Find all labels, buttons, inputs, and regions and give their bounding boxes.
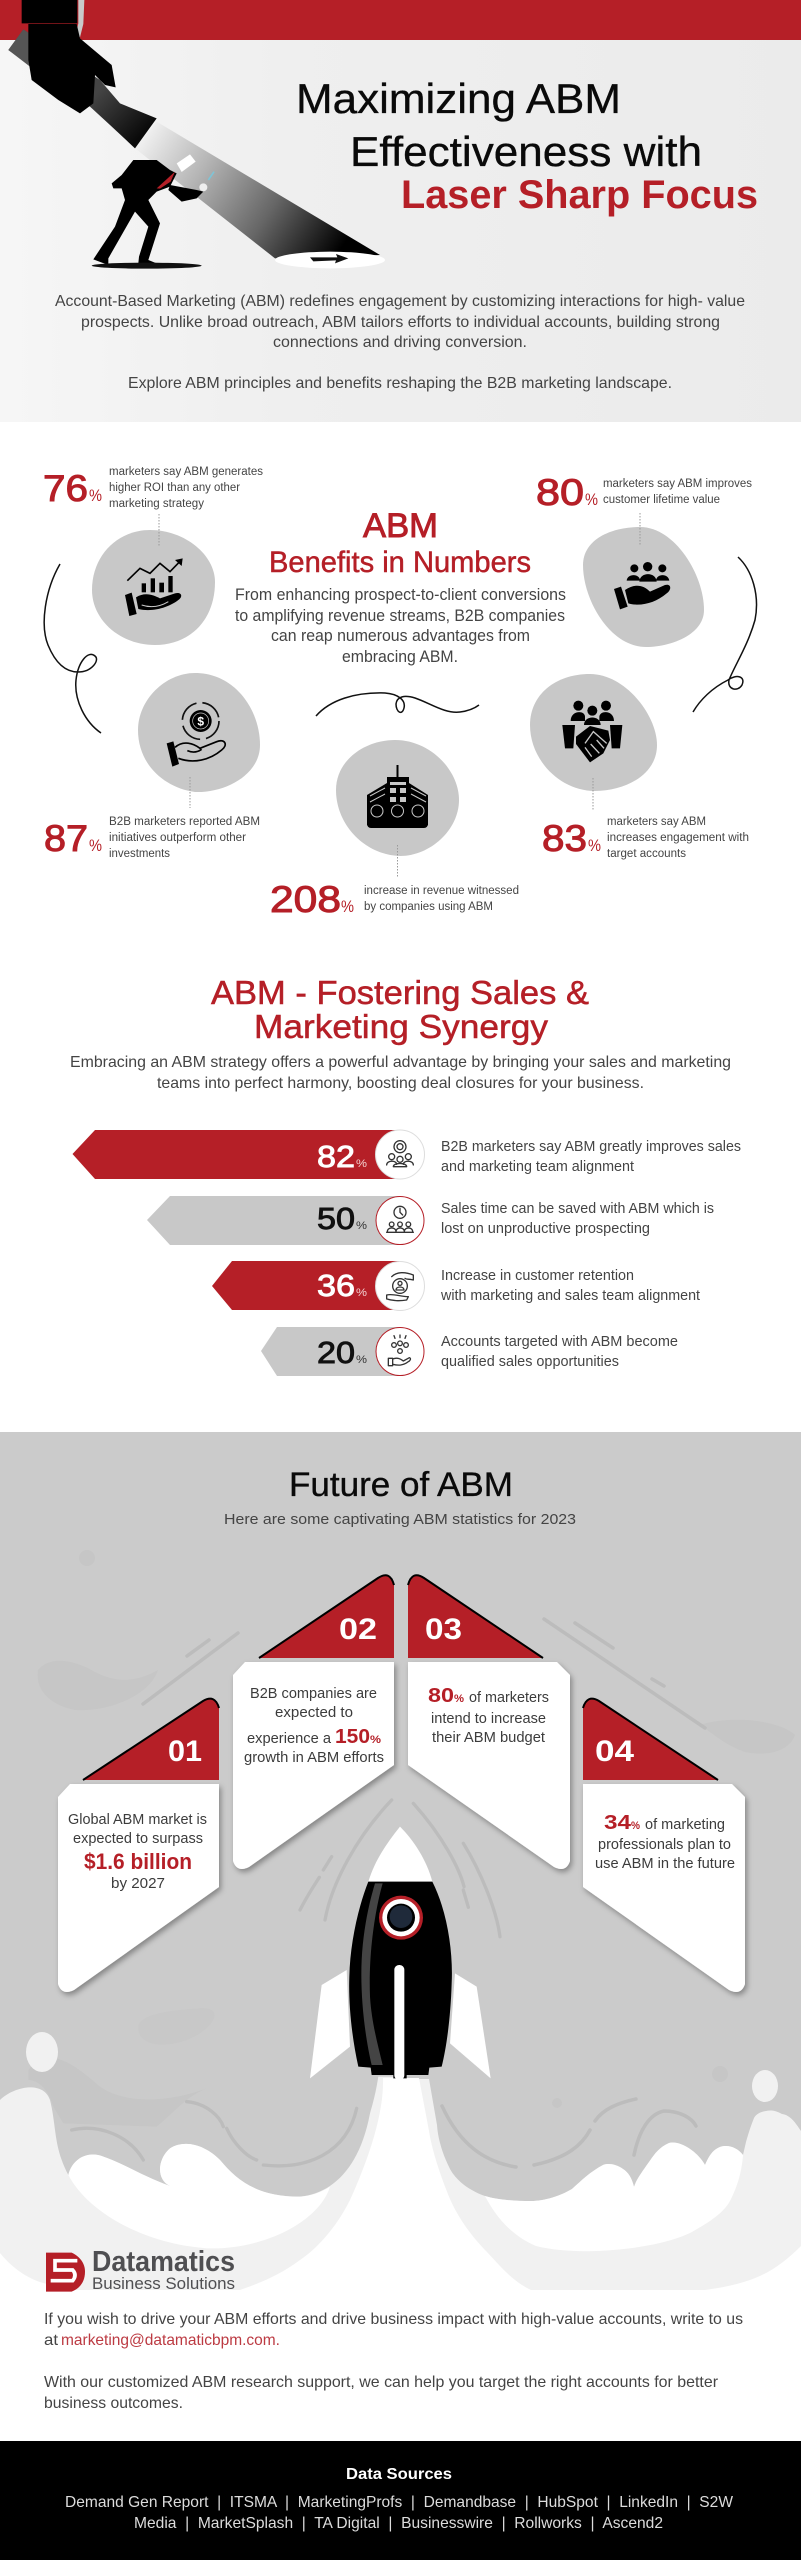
intro text: connections and driving conversion. [273, 334, 527, 351]
card 02: 150 [335, 1726, 370, 1748]
light smoke [0, 2077, 400, 2290]
card 02 [233, 1575, 394, 1869]
heading: ABM benefits [269, 507, 531, 579]
card 03 [408, 1575, 570, 1869]
bar: 36%: with marketing and sales team alignment [440, 1287, 701, 1304]
heading: ABM benefits: ABM [363, 507, 438, 545]
card 04: professionals plan to [598, 1837, 731, 1853]
stat: 87%: investments [109, 848, 170, 860]
illustration: rocket [310, 1827, 491, 2080]
bar: 20%: qualified sales opportunities [441, 1353, 619, 1370]
bar: 82%: and marketing team alignment [441, 1158, 635, 1175]
heading: synergy: ABM - Fostering Sales & [211, 974, 589, 1011]
panel: benefits in numbers [43, 466, 756, 920]
stat: 80%: customer lifetime value [603, 494, 720, 506]
blob icon: handshake [530, 674, 657, 811]
card 01: by 2027 [111, 1876, 165, 1892]
exhaust trail [240, 2078, 531, 2290]
panel: data sources footer: Demand Gen Report | ITSMA | MarketingProfs | Demandbase | HubSpot | LinkedIn | S2W [65, 2494, 734, 2511]
heading: synergy: Marketing Synergy [254, 1008, 549, 1045]
card 01 [58, 1699, 219, 1992]
icon: clock and team [387, 1206, 413, 1232]
benefits intro text [235, 585, 566, 666]
stat: 80%: marketers say ABM improves [603, 478, 752, 490]
stat: 87% [44, 816, 260, 860]
card 02: 02 [339, 1613, 377, 1646]
panel: data sources footer: Media | MarketSplash | TA Digital | Businesswire | Rollworks | Ascend2 [134, 2515, 663, 2532]
bar: 20%: Accounts targeted with ABM become [441, 1333, 678, 1350]
logo: Datamatics: Datamatics [92, 2246, 235, 2278]
contact text: at [44, 2332, 59, 2349]
card 02: B2B companies are [250, 1686, 377, 1702]
blob icon: people on hand [583, 513, 704, 647]
bar: 50%: 50 [317, 1201, 355, 1236]
bar: 20% [261, 1327, 678, 1376]
stat: 83%: increases engagement with [607, 832, 749, 844]
heading: synergy [211, 974, 589, 1045]
panel: data sources footer [0, 2441, 801, 2560]
card 03: 80 [428, 1685, 454, 1707]
benefits intro text: to amplifying revenue streams, B2B companies [235, 606, 565, 625]
card 02: % [370, 1734, 381, 1746]
stat: 83%: marketers say ABM [607, 816, 706, 828]
stat: 76%: marketing strategy [109, 498, 204, 510]
stat: 208%: % [341, 897, 354, 916]
title: Effectiveness with [350, 128, 702, 175]
synergy intro text [70, 1054, 731, 1092]
card 03: % [454, 1693, 464, 1705]
stat: 208%: 208 [270, 879, 341, 920]
title: Maximizing ABM [296, 75, 621, 122]
panel: data sources footer: Data Sources [346, 2466, 452, 2483]
stat: 80%: % [585, 490, 598, 509]
blob icon: dollar on hand: $ [197, 714, 204, 728]
bar: 50%: lost on unproductive prospecting [441, 1220, 650, 1237]
stat: 87%: % [89, 836, 102, 855]
card 02: growth in ABM efforts [244, 1750, 384, 1766]
bar: 82% [72, 1130, 741, 1179]
card 03: their ABM budget [432, 1730, 545, 1746]
subheading: Here are some captivating ABM statistics for 2023 [224, 1511, 576, 1528]
stat: 87%: 87 [44, 818, 88, 859]
icon: stars on hand [388, 1335, 410, 1366]
bar: 82%: % [356, 1158, 367, 1170]
bar: 50%: % [356, 1220, 367, 1232]
intro text: prospects. Unlike broad outreach, ABM tailors efforts to individual accounts, building strong [81, 314, 720, 331]
stat: 87%: initiatives outperform other [109, 832, 246, 844]
benefits intro text: embracing ABM. [342, 647, 458, 666]
stat: 208%: by companies using ABM [364, 901, 493, 913]
bar: 82%: 82 [317, 1139, 355, 1174]
contact text: business outcomes. [44, 2395, 183, 2412]
card 03: intend to increase [431, 1711, 546, 1727]
card 01: Global ABM market is [68, 1812, 207, 1828]
illustration: flashlight and businessman [8, 0, 385, 269]
card 04 [583, 1699, 745, 1992]
panel: header [0, 0, 801, 422]
bar: 50%: Sales time can be saved with ABM which is [441, 1200, 714, 1217]
benefits intro text: can reap numerous advantages from [271, 626, 530, 645]
bar: 20%: 20 [317, 1335, 355, 1370]
card 04: % [631, 1820, 640, 1832]
logo: Datamatics [46, 2246, 235, 2293]
stat: 83% [542, 816, 749, 860]
panel: future of ABM [0, 1432, 801, 2290]
stat: 80%: 80 [536, 472, 584, 513]
card 04: use ABM in the future [595, 1856, 735, 1872]
card 01: 01 [168, 1735, 202, 1768]
stat: 208% [270, 879, 519, 920]
logo: Datamatics: Business Solutions [92, 2275, 235, 2293]
synergy intro text: Embracing an ABM strategy offers a powerful advantage by bringing your sales and marketing [70, 1054, 731, 1071]
background smoke clouds [0, 1550, 801, 2290]
bar: 82%: B2B marketers say ABM greatly improves sales [441, 1138, 741, 1155]
heading: future of ABM: Future of ABM [289, 1466, 513, 1504]
stat: 83%: % [588, 836, 601, 855]
contact text: With our customized ABM research support, we can help you target the right accounts for better [44, 2374, 719, 2391]
stat: 80% [536, 472, 752, 513]
intro text: Account-Based Marketing (ABM) redefines engagement by customizing interactions for high- value [55, 293, 745, 310]
decorative squiggles [44, 557, 756, 733]
card 01: $1.6 billion [84, 1849, 192, 1874]
contact text [44, 2311, 743, 2412]
card 04: 04 [595, 1735, 634, 1768]
card 04: of marketing [645, 1817, 725, 1833]
card 01: expected to surpass [73, 1831, 203, 1847]
card 02: experience a [247, 1731, 332, 1747]
contact text: marketing@datamaticbpm.com. [61, 2332, 280, 2349]
blob icon: dollar on hand [138, 673, 260, 808]
red top band [0, 0, 801, 40]
card 02: expected to [275, 1705, 353, 1721]
stat: 76% [43, 466, 263, 510]
intro text: Explore ABM principles and benefits reshaping the B2B marketing landscape. [128, 375, 672, 392]
card 04: 34 [604, 1812, 632, 1834]
bar: 36% [212, 1261, 701, 1310]
blob icon: growth chart on hand [92, 514, 215, 645]
synergy intro text: teams into perfect harmony, boosting deal closures for your business. [157, 1075, 644, 1092]
white smoke [68, 2144, 330, 2248]
bar: 36%: 36 [317, 1268, 355, 1303]
blob icon: office building with people [336, 740, 459, 878]
title: Laser Sharp Focus [401, 173, 758, 217]
bar: 50% [147, 1196, 714, 1245]
card 03: of marketers [469, 1690, 549, 1706]
bar: 36%: % [356, 1287, 367, 1299]
stat: 87%: B2B marketers reported ABM [109, 816, 260, 828]
intro text [55, 293, 745, 392]
heading: ABM benefits: Benefits in Numbers [269, 546, 531, 579]
stat: 83%: target accounts [607, 848, 686, 860]
stat: 76%: marketers say ABM generates [109, 466, 263, 478]
benefits intro text: From enhancing prospect-to-client conversions [235, 585, 566, 604]
stat: 76%: higher ROI than any other [109, 482, 240, 494]
panel: sales and marketing synergy [70, 974, 741, 1376]
stat: 76%: % [89, 486, 102, 505]
contact text: If you wish to drive your ABM efforts and drive business impact with high-value accounts, write to us [44, 2311, 743, 2328]
stat: 208%: increase in revenue witnessed [364, 885, 519, 897]
icon: hands around person [387, 1273, 413, 1301]
stat: 76%: 76 [43, 468, 88, 509]
bar: 36%: Increase in customer retention [441, 1267, 634, 1284]
stat: 83%: 83 [542, 818, 587, 859]
title [296, 75, 758, 217]
card 03: 03 [425, 1613, 462, 1646]
bar: 20%: % [356, 1354, 367, 1366]
icon: team with coin [387, 1141, 413, 1167]
